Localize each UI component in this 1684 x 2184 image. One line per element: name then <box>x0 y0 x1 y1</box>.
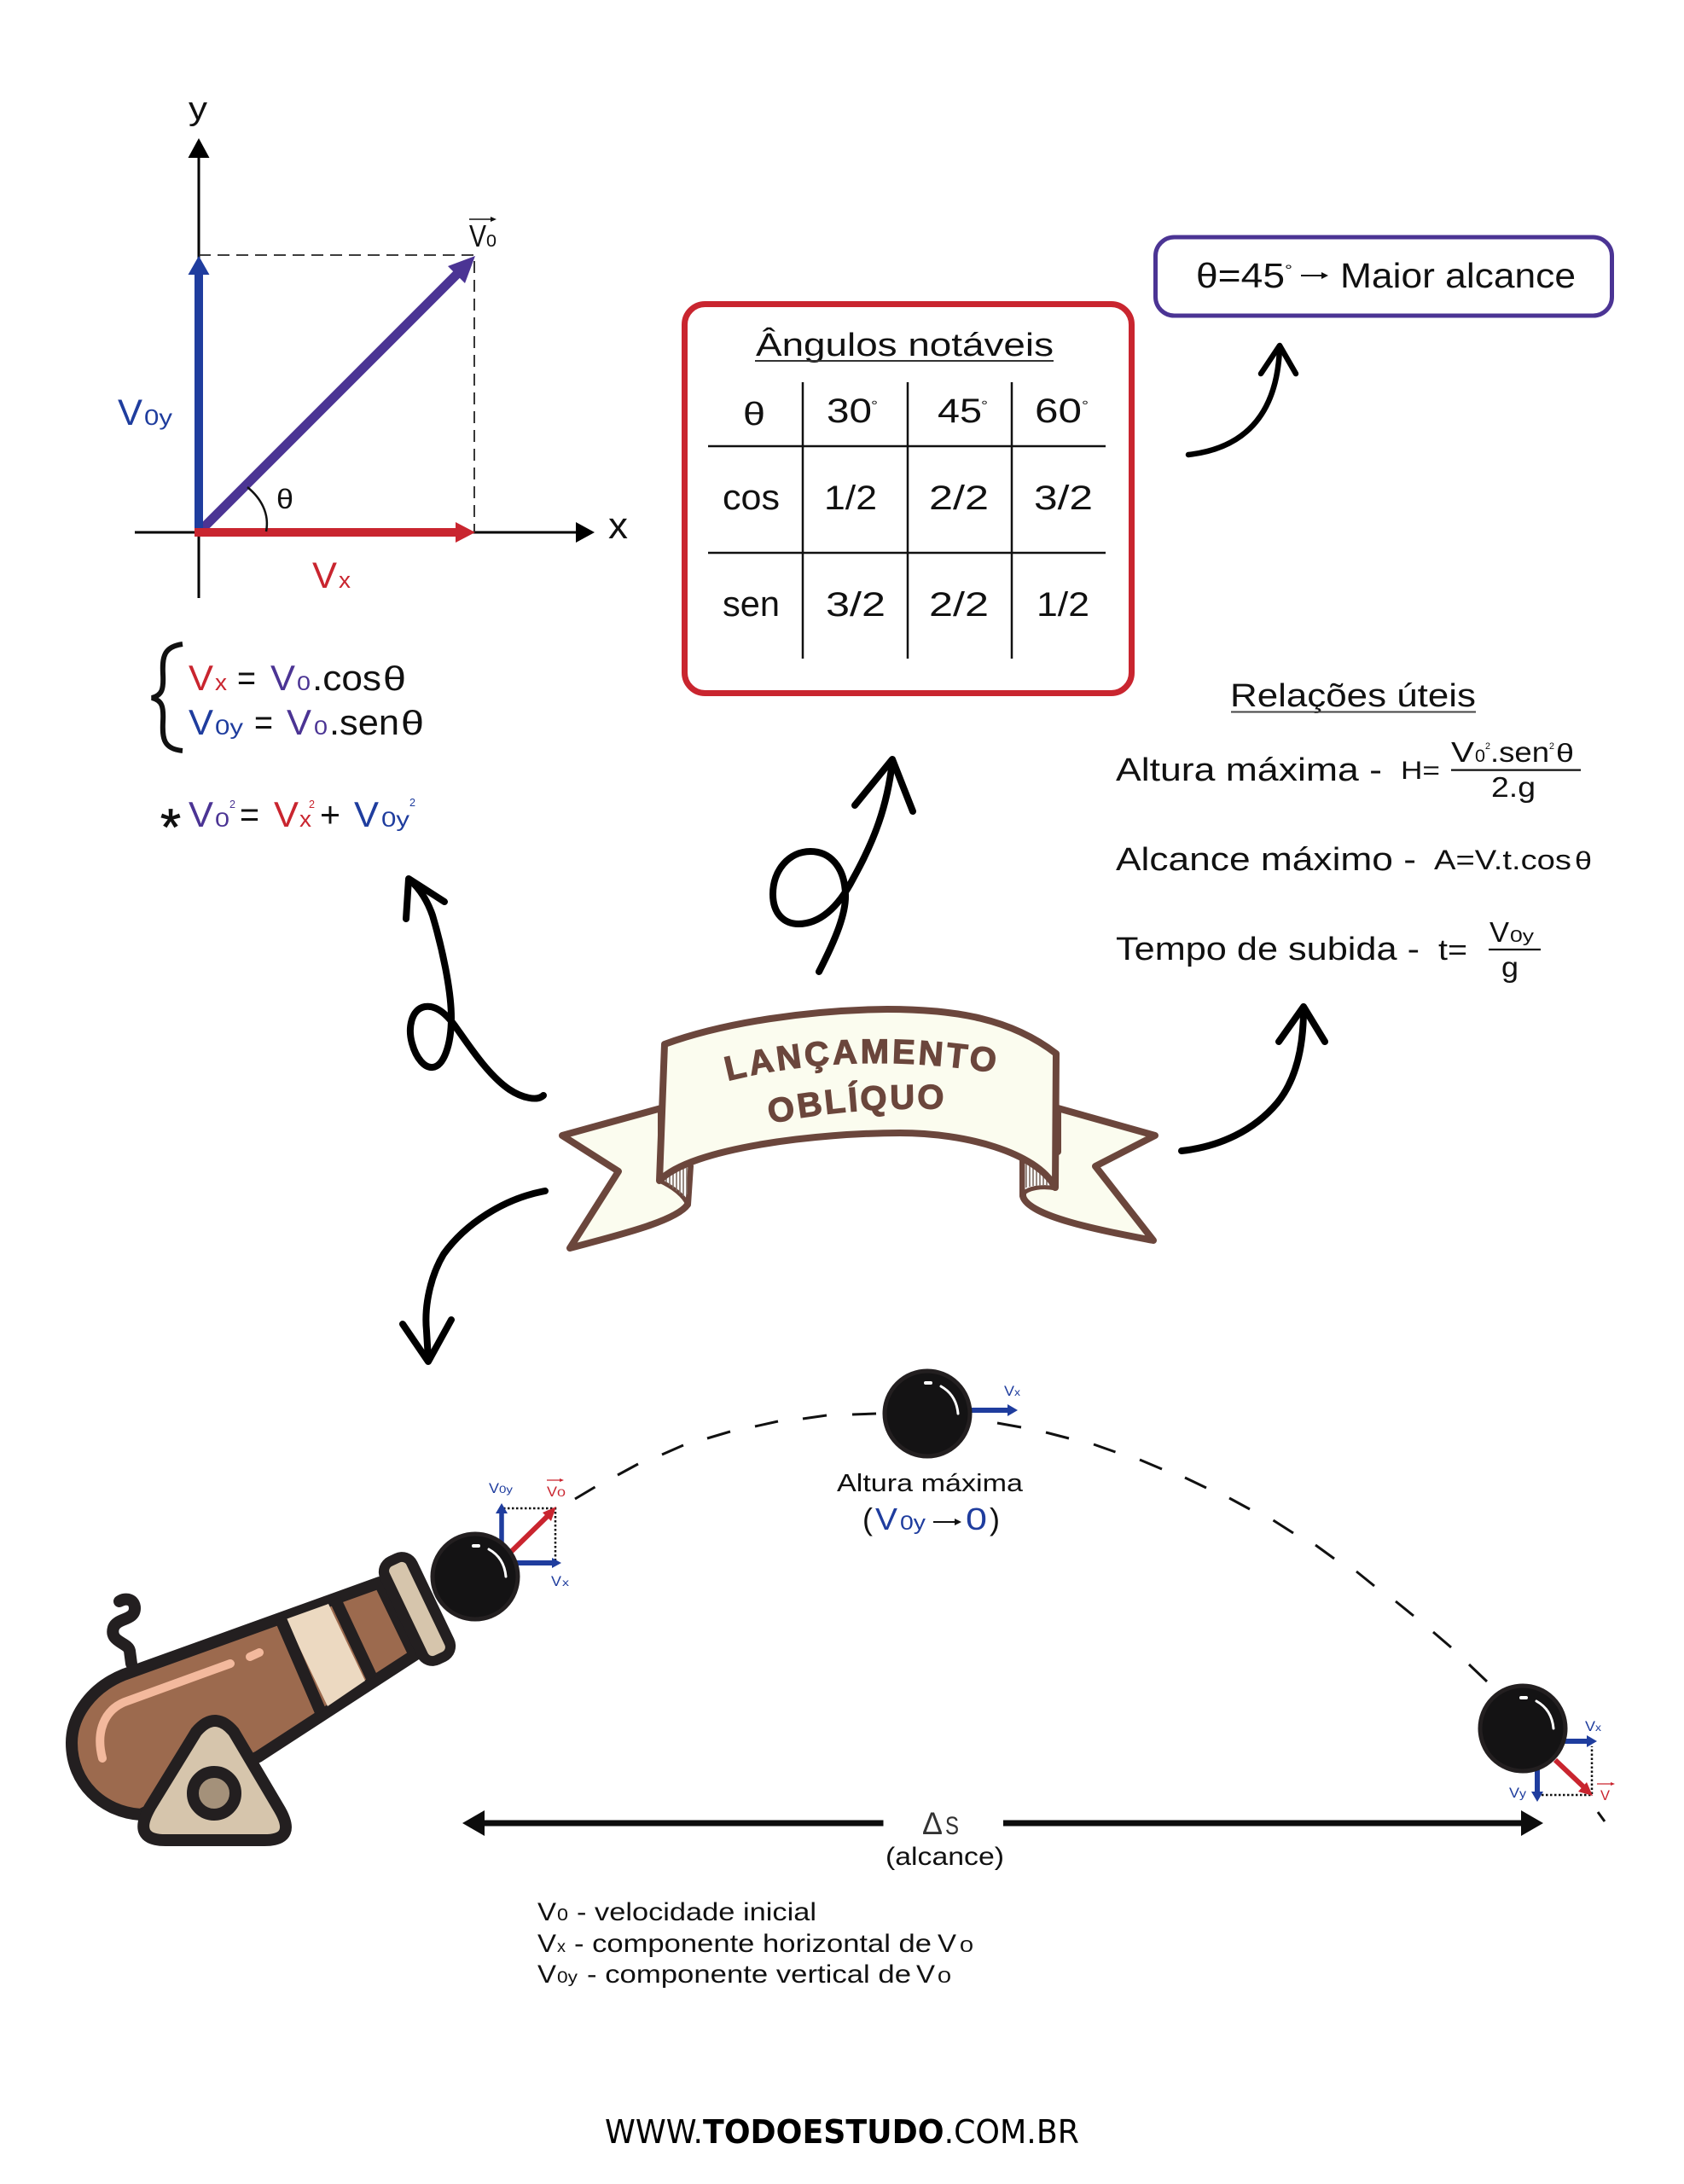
formula: sum of squares: 0y <box>381 808 410 832</box>
formula: V0y: θ <box>401 705 424 742</box>
launch arrow up <box>496 1503 508 1548</box>
formula: sum of squares <box>160 794 415 856</box>
launch dotted box <box>503 1508 555 1563</box>
formula: Vx: 0 <box>297 672 311 695</box>
impact label Vx: V <box>1585 1718 1596 1734</box>
apex vector Vx: V <box>1004 1383 1015 1399</box>
y axis <box>188 138 210 598</box>
max range formula: A=V.t.cos <box>1434 845 1571 875</box>
header row <box>743 392 1089 433</box>
formula: sum of squares: * <box>160 799 181 856</box>
impact label V: V <box>1600 1787 1611 1804</box>
range label: (alcance) <box>886 1843 1004 1871</box>
impact label Vy <box>1509 1785 1526 1801</box>
formula: sum of squares: 2 <box>309 798 315 810</box>
formula: sum of squares: 0 <box>215 809 229 832</box>
label: Vx: x <box>339 567 351 593</box>
impact label Vy: y <box>1519 1786 1526 1800</box>
max range formula: Alcance máximo - <box>1116 842 1416 878</box>
legend line 2: 0 <box>960 1937 973 1956</box>
rise time formula: 0y <box>1510 927 1534 946</box>
launch arrow red <box>510 1507 556 1553</box>
max height formula: Altura máxima - <box>1116 752 1382 788</box>
legend line 1: V <box>537 1898 556 1926</box>
label: theta: θ <box>276 484 293 514</box>
launch label Vx: x <box>562 1577 569 1589</box>
launch label V0y: 0y <box>499 1484 513 1496</box>
legend line 3: V <box>537 1960 556 1989</box>
max height formula <box>1116 736 1581 803</box>
arrow: table to callout <box>1188 346 1296 455</box>
banner: title ribbon <box>559 1006 1158 1252</box>
launch label V0 <box>547 1478 566 1500</box>
brace <box>152 644 183 751</box>
dashed trajectory <box>575 1414 1605 1821</box>
range arrow right part <box>1003 1810 1543 1836</box>
launch label V0y: V <box>489 1480 500 1496</box>
label: Vx <box>312 555 351 596</box>
cos row: 1/2 <box>824 479 877 517</box>
formula: Vx: θ <box>383 660 406 698</box>
formula: sum of squares: V <box>189 794 213 834</box>
label: maximum height: 0 <box>966 1502 987 1536</box>
max height formula: 2 <box>1485 741 1490 752</box>
table title: Ângulos notáveis <box>756 327 1054 363</box>
formula: sum of squares: 2 <box>229 798 235 810</box>
angle arc <box>247 487 267 531</box>
cannon band lines <box>281 1600 372 1712</box>
cannonball: apex <box>885 1371 970 1456</box>
label: maximum height: 0y <box>900 1512 926 1535</box>
left fold shading <box>659 1165 690 1205</box>
rise time formula <box>1116 916 1541 983</box>
sen row: 2/2 <box>929 586 989 624</box>
relations title: Relações úteis <box>1230 678 1476 714</box>
legend line 2: V <box>938 1930 956 1958</box>
arrow: banner to table with loop <box>773 759 913 972</box>
footer URL: WWW.TODOESTUDO.COM.BR <box>605 2113 1079 2151</box>
label: maximum height: V <box>875 1502 897 1536</box>
max height formula: H= <box>1401 757 1440 785</box>
label: V0 vector: 0 <box>486 232 496 251</box>
label: V0 vector: V <box>469 218 486 253</box>
header row: ° <box>1082 398 1089 413</box>
label: Vx: V <box>312 555 337 596</box>
legend line 2: - componente horizontal de <box>574 1930 932 1958</box>
legend line 3: - componente vertical de <box>587 1960 911 1989</box>
range arrow left part <box>462 1810 884 1836</box>
cannonball: impact <box>1480 1686 1565 1771</box>
x axis <box>135 522 595 543</box>
banner title line 2: OBLÍQUO <box>768 1080 944 1123</box>
launch label Vx <box>551 1573 569 1589</box>
max height formula: 2 <box>1549 741 1554 752</box>
label: y: y <box>189 91 207 127</box>
cannon cream band <box>286 1604 365 1706</box>
label: V0y: V <box>118 392 142 433</box>
max range formula: θ <box>1575 847 1592 875</box>
label: x: x <box>608 505 628 547</box>
legend <box>537 1898 973 1989</box>
arrow: Vx red <box>195 522 475 543</box>
formula: V0y: = <box>254 702 273 742</box>
header row: θ <box>743 397 765 433</box>
legend line 3: 0 <box>938 1968 951 1987</box>
rise time formula: t= <box>1438 934 1467 967</box>
right fold shading <box>1023 1143 1056 1194</box>
rise time formula: g <box>1501 951 1519 983</box>
cannon <box>72 1546 462 1840</box>
table grid <box>708 382 1106 659</box>
cannon fuse <box>113 1600 135 1664</box>
sen row <box>723 584 1089 624</box>
label: V0y <box>118 392 172 433</box>
range label <box>886 1806 1004 1871</box>
range label: S <box>945 1812 959 1840</box>
label: maximum height <box>837 1470 1024 1536</box>
max height formula: θ <box>1556 738 1574 768</box>
header row: ° <box>871 398 878 413</box>
sen row: 1/2 <box>1037 586 1089 624</box>
label: V0y: 0y <box>144 404 172 430</box>
sen row: 3/2 <box>826 586 886 624</box>
formula: V0y: .sen <box>329 702 399 742</box>
formula: sum of squares: V <box>354 794 379 834</box>
formula: V0y: V <box>287 702 311 742</box>
impact label Vx: x <box>1595 1722 1601 1734</box>
max range formula <box>1116 842 1592 878</box>
callout: greatest range <box>1155 237 1612 316</box>
launch arrow right <box>512 1558 561 1568</box>
cos row: 2/2 <box>929 479 989 517</box>
formula: V0y: V <box>189 702 213 742</box>
legend line 3: V <box>916 1960 935 1989</box>
label: maximum height: Altura máxima <box>837 1470 1024 1497</box>
impact label Vy: V <box>1509 1785 1520 1801</box>
legend line 2: x <box>557 1938 566 1956</box>
legend line 3: 0y <box>557 1969 578 1987</box>
impact arrow right <box>1563 1735 1597 1747</box>
ribbon left tail <box>562 1108 690 1248</box>
formula: V0y <box>189 702 424 742</box>
max height formula: .sen <box>1490 736 1549 768</box>
arrow: banner to trajectory <box>403 1191 545 1362</box>
arrow: banner to vector diagram with loop <box>406 879 543 1099</box>
legend line 1: 0 <box>557 1906 568 1925</box>
arrow: V0 purple <box>199 256 475 532</box>
legend line 1: - velocidade inicial <box>577 1898 816 1926</box>
label: maximum height: ( <box>862 1502 873 1536</box>
header row: 60 <box>1035 392 1082 430</box>
launch label Vx: V <box>551 1573 562 1589</box>
formula: Vx: V <box>270 658 295 698</box>
formula: Vx: = <box>237 658 256 698</box>
header row: 30 <box>827 392 872 430</box>
launch point vectors <box>489 1478 569 1589</box>
impact label Vx <box>1585 1718 1601 1734</box>
max height formula: V <box>1451 736 1474 768</box>
formula: sum of squares: x <box>299 806 312 832</box>
rise time formula: Tempo de subida - <box>1116 932 1420 967</box>
launch label V0: 0 <box>557 1487 566 1499</box>
legend line 3 <box>537 1960 951 1989</box>
sen row: sen <box>723 584 780 624</box>
component formulas <box>152 644 424 856</box>
vector diagram <box>118 91 628 598</box>
apex vector Vx: x <box>1014 1386 1020 1398</box>
rise time formula: V <box>1489 916 1509 948</box>
formula: Vx: .cos <box>312 658 381 698</box>
launch label V0: V <box>547 1484 558 1500</box>
range arrow <box>462 1806 1543 1871</box>
banner title line 1: LANÇAMENTO <box>723 1039 996 1081</box>
formula: sum of squares: + <box>320 794 340 834</box>
header row: ° <box>981 398 988 413</box>
impact arrow down <box>1531 1768 1543 1802</box>
callout text: θ=45 <box>1196 256 1285 295</box>
ribbon right tail <box>1023 1108 1155 1240</box>
header row: 45 <box>938 392 982 430</box>
arrow: banner to relations <box>1182 1007 1325 1151</box>
cos row <box>723 477 1093 517</box>
barrel highlights <box>100 1653 259 1758</box>
cannonball: launch <box>433 1534 518 1619</box>
formula: V0y: 0 <box>314 717 328 740</box>
impact dotted box <box>1542 1746 1592 1795</box>
impact point vectors <box>1509 1718 1615 1804</box>
formula: Vx: V <box>189 658 213 698</box>
ribbon main band <box>659 1009 1056 1188</box>
impact arrow red <box>1555 1760 1593 1796</box>
formula: sum of squares: = <box>240 794 259 834</box>
panel: notable angles table <box>684 304 1131 693</box>
formula: Vx: x <box>215 670 228 695</box>
max height formula: 2.g <box>1491 771 1536 803</box>
cannon wheel <box>193 1772 235 1815</box>
formula: V0y: 0y <box>215 716 244 740</box>
max height formula: 0 <box>1475 746 1485 766</box>
callout frame <box>1155 237 1612 316</box>
apex vector Vx <box>968 1383 1020 1416</box>
panel: useful relations <box>1116 678 1592 983</box>
table frame <box>684 304 1131 693</box>
callout text <box>1196 256 1576 295</box>
arrow: V0y blue <box>188 256 210 536</box>
cos row: cos <box>723 477 780 517</box>
callout text: ° <box>1285 262 1292 278</box>
formula: sum of squares: V <box>274 794 299 834</box>
cannon muzzle collar <box>373 1546 462 1672</box>
dashed projection lines <box>199 255 474 532</box>
formula: sum of squares: 2 <box>409 796 415 809</box>
cos row: 3/2 <box>1034 479 1093 517</box>
cannon carriage <box>143 1721 286 1840</box>
range label: Δ <box>922 1806 943 1841</box>
formula: Vx <box>189 658 406 698</box>
callout text: Maior alcance <box>1340 256 1576 295</box>
cannon barrel <box>72 1583 415 1815</box>
launch label V0y <box>489 1480 513 1496</box>
legend line 2: V <box>537 1930 556 1958</box>
label: maximum height: ) <box>990 1502 1000 1536</box>
